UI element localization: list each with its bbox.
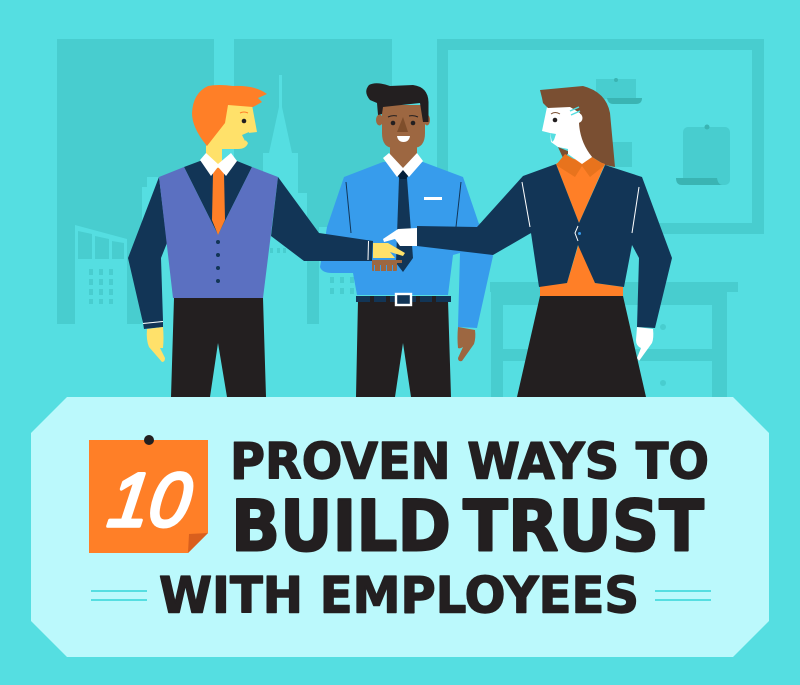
- handshake: brown fingers: [372, 260, 402, 271]
- eye: [553, 118, 557, 122]
- handshake: yellow hand: [373, 243, 405, 258]
- figure: woman in navy jacket: [383, 86, 672, 397]
- neck and face: [382, 105, 425, 168]
- right decorative rules: [655, 590, 711, 601]
- nose: [397, 117, 408, 132]
- smile: [397, 136, 410, 142]
- low-rise building with slanted roof: [75, 75, 392, 324]
- left cuff: [143, 321, 163, 329]
- jacket seams: [522, 182, 639, 241]
- collar: [200, 153, 237, 176]
- sticky note with number 10: [89, 435, 208, 553]
- tie: [396, 178, 413, 272]
- skirt: [517, 296, 646, 397]
- chest: [184, 161, 252, 235]
- waist: [540, 243, 623, 296]
- title line 2: TRUST: [463, 486, 704, 568]
- head and neck: [206, 104, 257, 168]
- left window: [57, 39, 214, 324]
- sleeve fold lines: [346, 182, 461, 233]
- background: desk with drawers: [490, 282, 738, 397]
- left sleeve: [128, 177, 167, 323]
- pointing hand: [383, 228, 417, 246]
- barrette: [570, 107, 580, 115]
- hair: [192, 85, 267, 146]
- blouse: [556, 158, 605, 223]
- figure: man in blue shirt: [320, 83, 493, 397]
- title line 2: BUILD: [231, 486, 451, 568]
- right arm: [271, 177, 373, 261]
- mouth: [550, 133, 556, 142]
- ear: [218, 114, 226, 124]
- hair: [366, 83, 428, 122]
- title line 1: PROVEN WAYS TO: [230, 432, 709, 490]
- eyes: [391, 121, 395, 125]
- background: office windows with city skyline: [57, 39, 392, 324]
- title line 3: WITH EMPLOYEES: [159, 566, 639, 624]
- pocket: [424, 197, 442, 200]
- belt: [356, 296, 451, 302]
- belt buckle: [396, 294, 411, 305]
- title banner: [31, 397, 769, 657]
- shirt: [320, 162, 493, 328]
- trousers: [171, 298, 266, 397]
- right hand: [458, 327, 475, 361]
- blouse collar: [556, 154, 605, 177]
- title line 2: [231, 486, 704, 568]
- left hand: [147, 327, 165, 362]
- right hand: [636, 327, 653, 361]
- collar: [383, 153, 423, 177]
- tie: [212, 167, 225, 235]
- right window: [234, 39, 392, 324]
- pinned note behind woman: [610, 142, 632, 167]
- sticky note with number 10: 10: [104, 458, 197, 543]
- left decorative rules: [91, 590, 147, 601]
- jacket: [417, 164, 672, 328]
- hair: [540, 86, 615, 167]
- trousers: [356, 300, 451, 397]
- background: picture frame with pinned notes: [437, 39, 764, 234]
- lower hair: [558, 147, 570, 158]
- face and neck: [542, 106, 592, 163]
- figure: man in purple vest: [128, 85, 373, 397]
- vest: [159, 167, 278, 298]
- pinned note top: [596, 78, 642, 104]
- mouth: [242, 132, 249, 141]
- button: [578, 232, 581, 235]
- eye: [242, 119, 246, 123]
- pinned note right: [676, 124, 730, 185]
